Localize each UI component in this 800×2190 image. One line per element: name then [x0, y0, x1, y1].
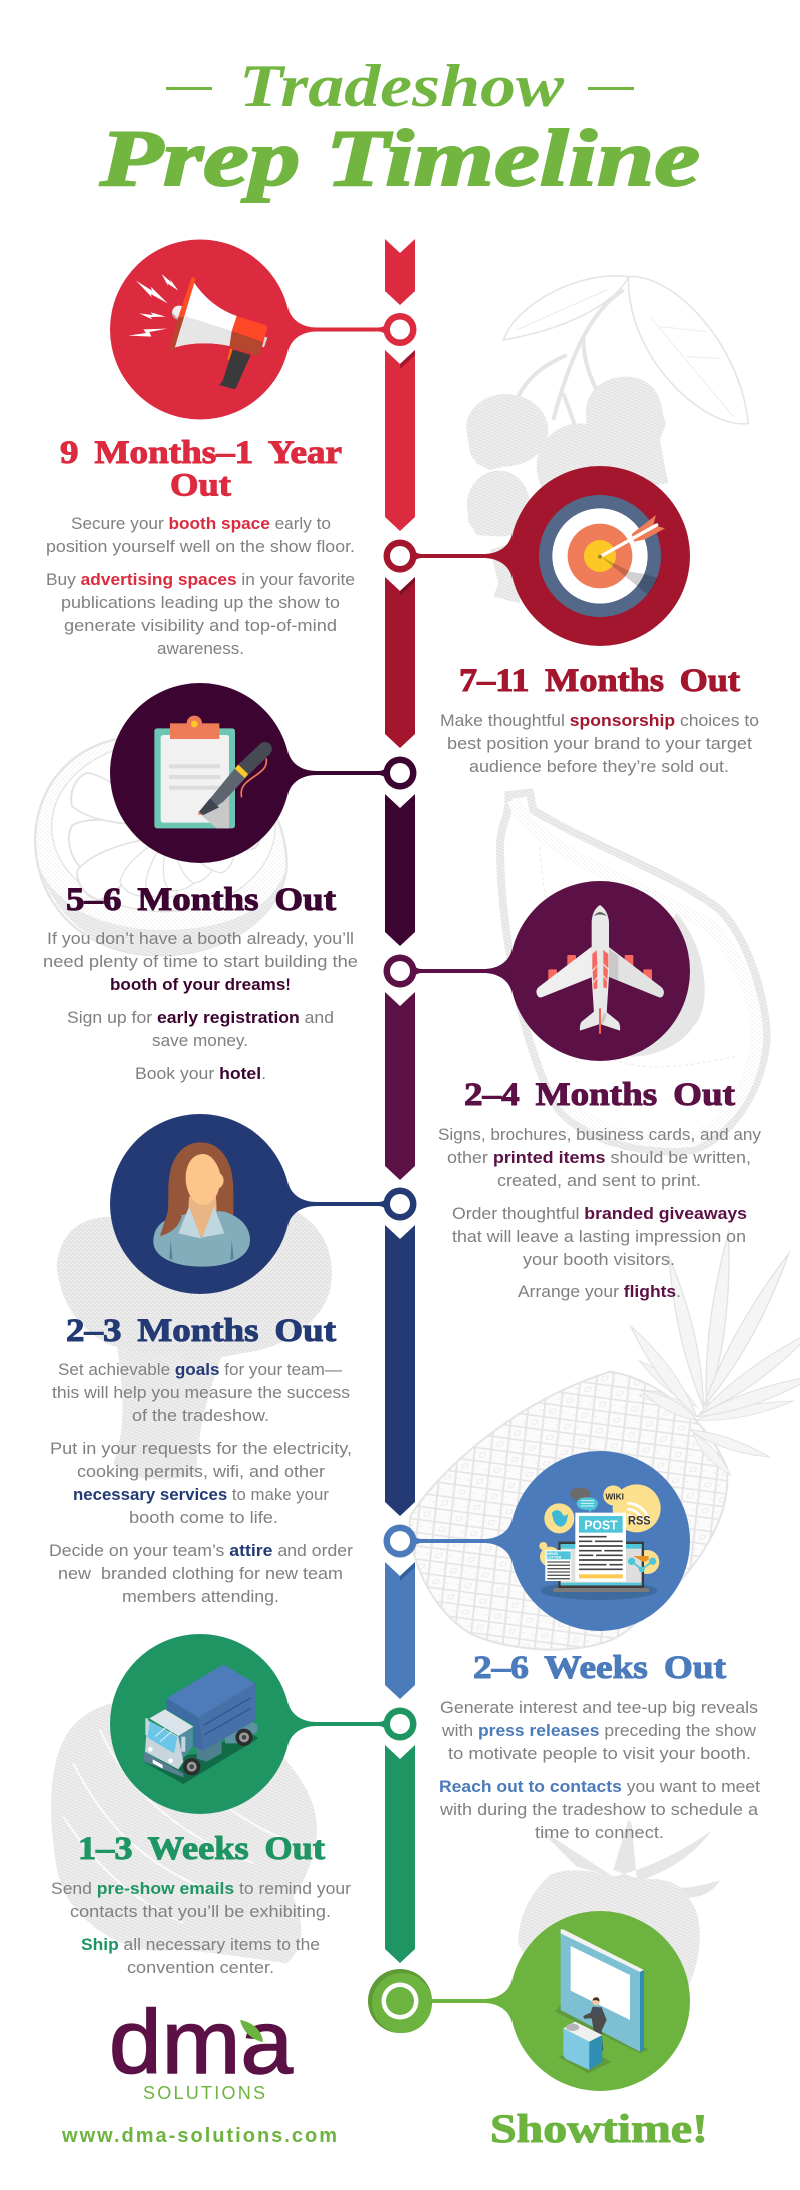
- text block: generate visibility and top-of-mind: [64, 616, 337, 635]
- connector and ring: [288, 1701, 416, 1747]
- panel: 7-11 months out: [384, 466, 759, 776]
- background fruit: raspberry: [518, 1820, 720, 2000]
- text block: Send pre-show emails to remind your: [51, 1879, 351, 1898]
- heading: 2–6 Weeks Out: [473, 1650, 726, 1686]
- text block: created, and sent to print.: [497, 1171, 701, 1190]
- icon: clipboard and pen: [110, 683, 290, 863]
- text block: that will leave a lasting impression on: [452, 1227, 746, 1246]
- panel: 9 months to 1 year out: [46, 240, 416, 658]
- connector and ring: [288, 306, 416, 353]
- text block: other printed items should be written,: [447, 1148, 751, 1167]
- text block: [43, 929, 358, 1083]
- heading: 7–11 Months Out: [459, 663, 740, 699]
- icon: press release on laptop: LETTER: [547, 1556, 562, 1560]
- icon: press release on laptop: POST: [584, 1518, 618, 1532]
- background fruit: cherries: [466, 276, 748, 603]
- text block: cooking permits, wifi, and other: [77, 1462, 325, 1481]
- text block: Decide on your team’s attire and order: [49, 1541, 353, 1560]
- text block: Reach out to contacts you want to meet: [439, 1777, 760, 1796]
- text block: position yourself well on the show floor.: [46, 537, 355, 556]
- text block: Put in your requests for the electricity,: [50, 1439, 352, 1458]
- text block: to motivate people to visit your booth.: [448, 1744, 751, 1763]
- text block: necessary services to make your: [73, 1485, 329, 1504]
- panel: 5-6 months out: [43, 683, 416, 1083]
- text block: If you don’t have a booth already, you’ll: [47, 929, 354, 948]
- text block: your booth visitors.: [523, 1250, 675, 1269]
- panel: 1-3 weeks out: [51, 1634, 416, 1977]
- logo: dma solutions: dma: [109, 1993, 294, 2093]
- text block: new branded clothing for new team: [58, 1564, 343, 1583]
- panel: 2-6 weeks out: [384, 1451, 760, 1842]
- text block: booth of your dreams!: [110, 975, 291, 994]
- text block: [51, 1879, 351, 1977]
- connector and ring: [384, 533, 512, 579]
- panel: 2-3 months out: [49, 1114, 416, 1606]
- text block: [46, 514, 355, 658]
- text block: booth come to life.: [129, 1508, 278, 1527]
- text block: save money.: [152, 1031, 248, 1050]
- heading: [60, 435, 342, 504]
- title: Tradeshow: [239, 53, 565, 119]
- text block: Order thoughtful branded giveaways: [452, 1204, 747, 1223]
- icon: megaphone: [110, 240, 290, 420]
- text block: [438, 1125, 762, 1301]
- icon: delivery truck: [110, 1634, 290, 1814]
- connector and final ring: [368, 1969, 512, 2033]
- text block: [439, 1698, 760, 1842]
- icon: press release on laptop: [510, 1451, 690, 1631]
- heading: 9 Months–1 Year: [60, 435, 342, 471]
- icon: woman portrait: [110, 1114, 290, 1294]
- icon: press release on laptop: RSS: [628, 1514, 651, 1528]
- text block: Buy advertising spaces in your favorite: [46, 570, 355, 589]
- title: [99, 53, 700, 203]
- text block: this will help you measure the success: [52, 1383, 350, 1402]
- heading: Out: [170, 468, 231, 504]
- text block: [440, 711, 759, 776]
- text block: publications leading up the show to: [61, 593, 340, 612]
- background fruit: broccoli: [57, 1210, 332, 1479]
- text block: time to connect.: [535, 1823, 664, 1842]
- background fruit: avocado: [500, 793, 767, 1151]
- text block: Signs, brochures, business cards, and any: [438, 1125, 762, 1144]
- icon: press release on laptop: NEWS: [547, 1552, 559, 1556]
- panel: 2-4 months out: [384, 881, 762, 1301]
- heading: 1–3 Weeks Out: [78, 1831, 325, 1867]
- text block: [49, 1360, 353, 1606]
- icon: airplane: [510, 881, 690, 1061]
- website url: www.dma-solutions.com: [61, 2125, 337, 2147]
- text block: Secure your booth space early to: [71, 514, 331, 533]
- text block: Arrange your flights.: [518, 1282, 681, 1301]
- connector and ring: [288, 750, 416, 796]
- text block: with during the tradeshow to schedule a: [439, 1800, 759, 1819]
- logo: dma solutions: SOLUTIONS: [143, 2083, 265, 2103]
- text block: Sign up for early registration and: [67, 1008, 334, 1027]
- text block: need plenty of time to start building the: [43, 952, 358, 971]
- text block: Ship all necessary items to the: [81, 1935, 320, 1954]
- text block: best position your brand to your target: [447, 734, 752, 753]
- heading: Showtime!: [490, 2106, 708, 2151]
- icon: target with arrow: [510, 466, 690, 646]
- text block: Book your hotel.: [135, 1064, 266, 1083]
- text block: Set achievable goals for your team—: [58, 1360, 342, 1379]
- text block: audience before they’re sold out.: [469, 757, 729, 776]
- connector and ring: [384, 1518, 512, 1564]
- timeline arrows: [385, 239, 415, 1963]
- text block: contacts that you’ll be exhibiting.: [70, 1902, 331, 1921]
- text block: convention center.: [127, 1958, 274, 1977]
- background fruit: citrus slice: [35, 737, 287, 955]
- background fruit: artichoke: [51, 1700, 317, 1963]
- connector and ring: [288, 1181, 416, 1227]
- text block: with press releases preceding the show: [441, 1721, 757, 1740]
- icon: press release on laptop: WIKI: [605, 1491, 624, 1501]
- text block: awareness.: [157, 639, 244, 658]
- background fruit: pineapple: [410, 1232, 800, 1650]
- panel: showtime: [368, 1911, 708, 2151]
- heading: 2–3 Months Out: [66, 1313, 336, 1349]
- text block: of the tradeshow.: [132, 1406, 269, 1425]
- connector and ring: [384, 948, 512, 994]
- heading: 5–6 Months Out: [66, 882, 336, 918]
- text block: members attending.: [122, 1587, 279, 1606]
- text block: Make thoughtful sponsorship choices to: [440, 711, 759, 730]
- heading: 2–4 Months Out: [464, 1077, 735, 1113]
- text block: Generate interest and tee-up big reveals: [440, 1698, 758, 1717]
- title: Prep Timeline: [99, 115, 700, 203]
- icon: presenter at booth: [510, 1911, 690, 2091]
